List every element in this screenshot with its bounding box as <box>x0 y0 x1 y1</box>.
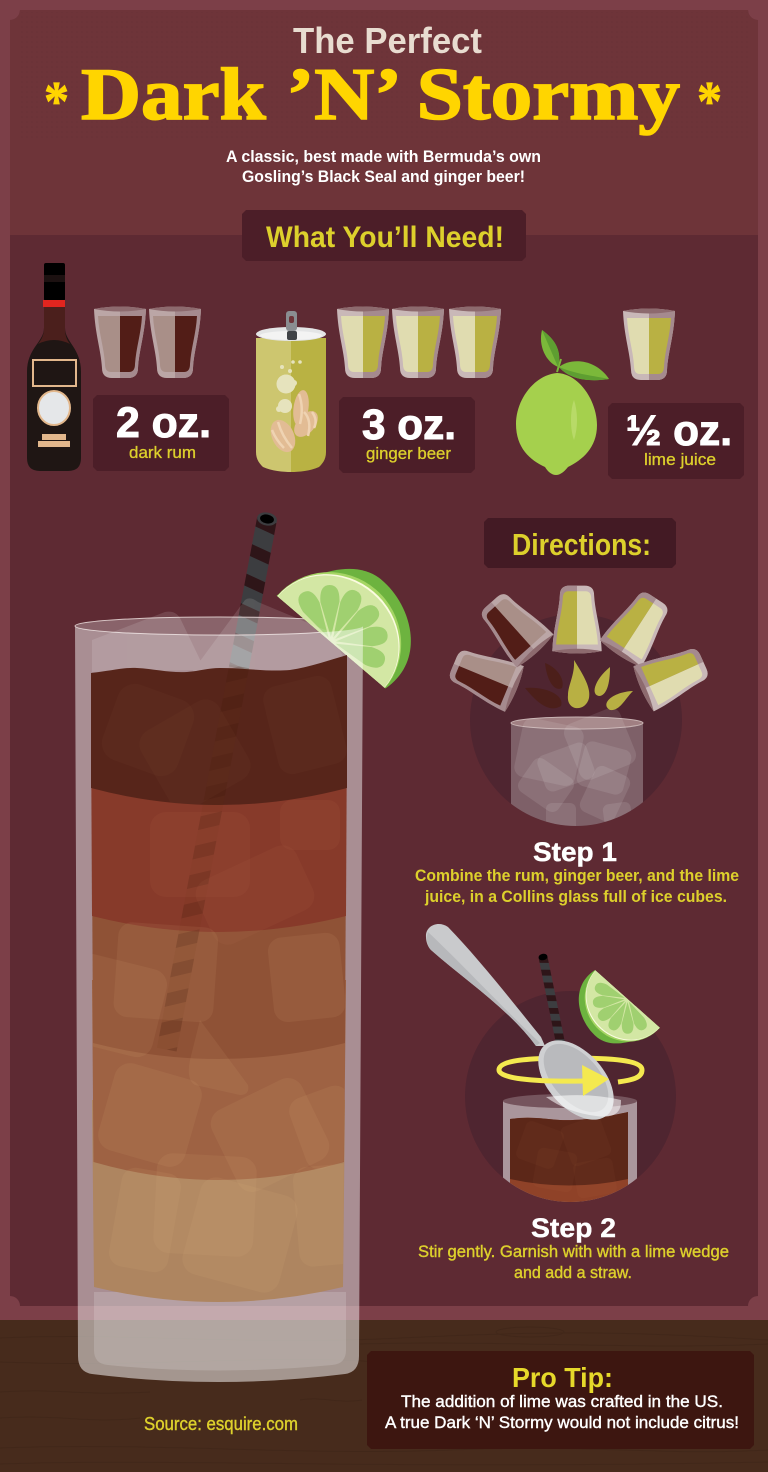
heading: Directions: Directions: <box>512 527 651 562</box>
pouring shot: rum left <box>444 641 526 713</box>
measure: 2 oz. dark rum: 2 oz. <box>116 399 211 447</box>
subtitle <box>226 147 541 186</box>
pouring shot: lime juice <box>552 586 602 654</box>
measure: 2 oz. dark rum <box>93 395 229 471</box>
measure: 3 oz. ginger beer: 3 oz. <box>362 401 456 449</box>
step 1 heading: Step 1 <box>533 837 617 867</box>
stirring ring front and arrow <box>499 1065 642 1096</box>
drink layer 2 <box>91 720 347 932</box>
step 1 backdrop circle <box>470 614 682 826</box>
icon: rum bottle <box>27 263 81 471</box>
measure: 2 oz. dark rum: dark rum <box>129 443 196 462</box>
icon: ginger beer can <box>256 311 326 472</box>
step 2 text <box>418 1242 729 1282</box>
title: Dark 'N' Stormy: Dark ’N’ Stormy <box>81 54 680 136</box>
drink layer 4 <box>92 980 346 1180</box>
title: The Perfect: The Perfect <box>293 20 482 61</box>
lime wedge garnish <box>272 535 439 695</box>
poured rum drops <box>525 663 563 708</box>
pro tip callout: A true Dark ‘N’ Stormy would not include citrus! <box>385 1413 739 1432</box>
source credit: Source: esquire.com <box>144 1414 298 1434</box>
pouring shot: rum right <box>473 586 555 669</box>
pro tip callout: The addition of lime was crafted in the US. <box>401 1392 723 1411</box>
title asterisk right: * <box>697 71 722 133</box>
measure: 3 oz. ginger beer: ginger beer <box>366 444 451 463</box>
subtitle: Gosling’s Black Seal and ginger beer! <box>242 167 525 186</box>
submerged straw <box>157 665 249 1051</box>
lime juice shot glass <box>623 308 675 380</box>
ice cubes in the second drink layer <box>150 800 340 950</box>
heading: What You'll Need: What You’ll Need! <box>266 221 504 254</box>
ice above the drink <box>92 598 345 672</box>
heading: What You'll Need <box>242 210 526 261</box>
icon: lime fruit <box>516 330 609 475</box>
pouring shot: ginger beer 2 <box>631 639 714 712</box>
step 1 text <box>415 866 739 906</box>
step 2 straw <box>538 953 565 1044</box>
step 2 heading: Step 2 <box>531 1213 616 1243</box>
drink layer 1 <box>91 655 347 805</box>
step 1 text: juice, in a Collins glass full of ice cubes. <box>424 887 727 906</box>
ginger beer shot glass 3 <box>449 306 501 378</box>
pouring shot: ginger beer 1 <box>599 585 677 669</box>
spoon <box>426 924 628 1134</box>
subtitle: A classic, best made with Bermuda’s own <box>226 147 541 166</box>
glass lower tint over table <box>78 1320 359 1382</box>
poured ginger beer and lime drops <box>568 660 633 710</box>
stirring ring back <box>499 1058 642 1070</box>
step 2 glass with drink <box>503 1094 637 1210</box>
ice cubes in the lower drink layers <box>92 922 344 1256</box>
step 1 illustration <box>444 585 714 835</box>
measure: 3 oz. ginger beer <box>339 397 475 473</box>
header band <box>10 10 758 235</box>
step 2 text: and add a straw. <box>514 1263 632 1282</box>
measure: half oz. lime juice: lime juice <box>644 450 716 469</box>
pro tip callout: Pro Tip: <box>512 1362 613 1393</box>
glass rim <box>75 617 363 635</box>
step 1 glass with ice <box>511 705 643 835</box>
measure: half oz. lime juice: ½ oz. <box>626 407 732 455</box>
title asterisk left: * <box>44 71 69 133</box>
drink layer 3 <box>92 860 346 1059</box>
rum shot glass 2 <box>149 306 201 378</box>
ice cubes in the top drink layer <box>97 673 350 816</box>
heading: Directions <box>484 518 676 568</box>
main cocktail glass illustration <box>74 512 411 1382</box>
step 2 backdrop circle <box>465 991 676 1202</box>
step 2 illustration <box>426 924 676 1210</box>
pro tip callout <box>367 1351 754 1449</box>
ginger beer shot glass 2 <box>392 306 444 378</box>
step 2 lime wedge <box>561 966 663 1065</box>
measure: half oz. lime juice <box>608 403 744 479</box>
step 2 text: Stir gently. Garnish with with a lime wedge <box>418 1242 729 1261</box>
straw above the drink <box>229 511 278 670</box>
glass base <box>94 1292 346 1370</box>
glass body <box>75 626 363 1382</box>
drink layer 5 <box>92 1100 345 1302</box>
rum shot glass 1 <box>94 306 146 378</box>
ginger beer shot glass 1 <box>337 306 389 378</box>
step 1 text: Combine the rum, ginger beer, and the lime <box>415 866 739 885</box>
wooden table <box>0 1320 768 1472</box>
